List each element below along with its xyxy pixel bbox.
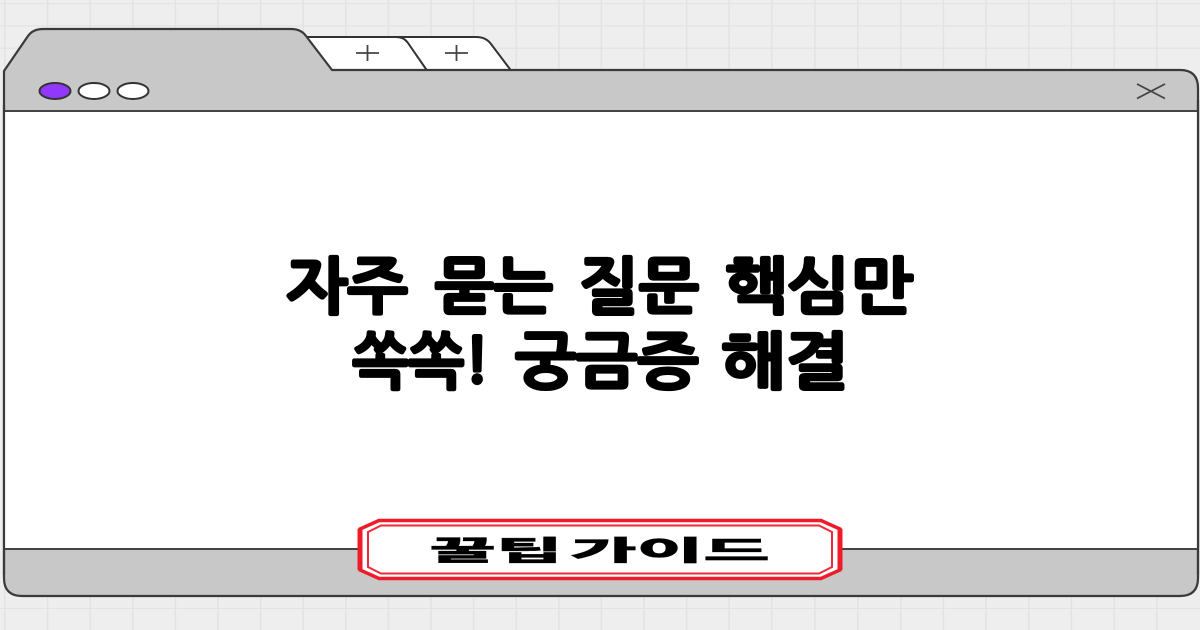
badge label: 꿀팁 — [429, 529, 563, 568]
title line 1: 묻는 — [435, 257, 553, 318]
badge: honey tip guide — [358, 519, 842, 580]
title line 1: 핵심만 — [724, 256, 913, 318]
title line 1: 질문 — [579, 256, 699, 318]
tab: second plus tab — [396, 37, 511, 70]
close icon — [1137, 84, 1165, 98]
white content area — [5, 111, 1197, 549]
badge outer octagon — [358, 519, 842, 580]
title line 2: 궁금증 — [515, 333, 699, 393]
title — [287, 256, 913, 393]
title line 1 — [287, 256, 913, 318]
title line 2: 쏙쏙! — [352, 331, 490, 392]
badge label — [429, 529, 770, 568]
badge inner octagon — [368, 526, 832, 574]
title line 2 — [352, 331, 849, 393]
title line 1: 자주 — [287, 256, 408, 318]
title line 2: 해결 — [721, 331, 849, 392]
window control dots — [40, 83, 148, 99]
tab: first plus tab — [300, 37, 427, 70]
badge label: 가이드 — [570, 529, 770, 568]
